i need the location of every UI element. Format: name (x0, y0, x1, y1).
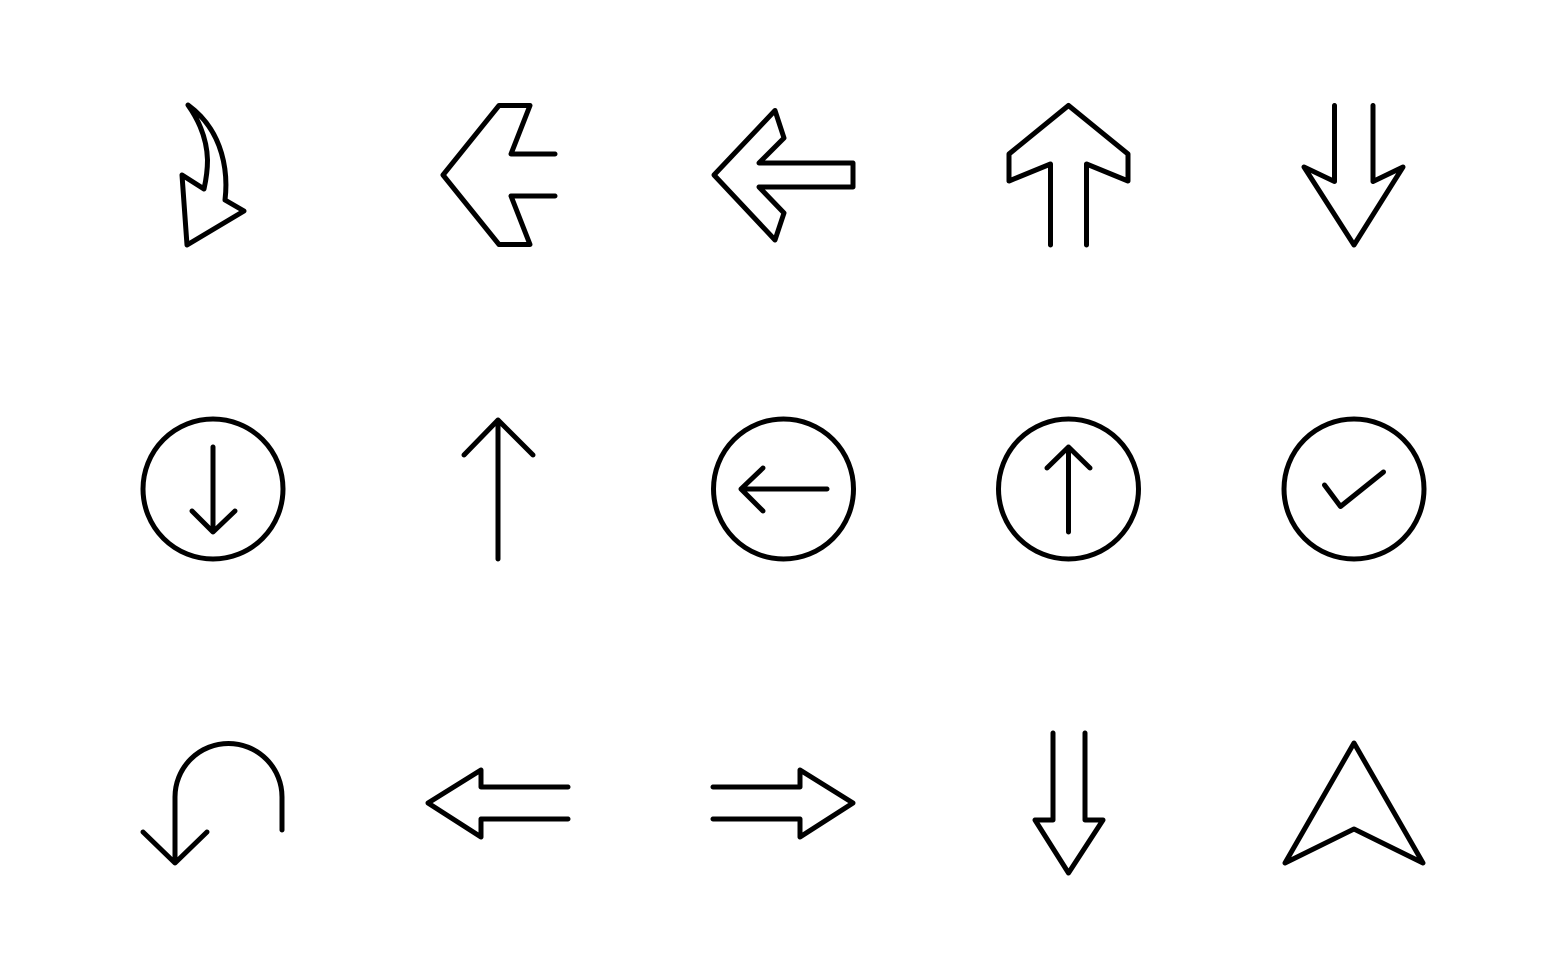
icon: double-line left arrow (428, 770, 568, 837)
icon: circled up arrow (998, 419, 1138, 559)
icon: thin up arrow (464, 420, 533, 559)
icon: navigation pointer (1285, 743, 1423, 863)
icon: narrow down arrow (1035, 733, 1103, 873)
icon: circled left arrow (714, 419, 854, 559)
icon: circled check mark (1284, 419, 1424, 559)
icon: wide left arrow with open tail (443, 106, 555, 244)
icon: u-turn arrow (143, 744, 282, 863)
icon: circled down arrow (143, 419, 283, 559)
icon: curved arrow down (182, 105, 244, 245)
icon: double-line right arrow (713, 770, 853, 837)
icon: left block arrow (714, 110, 853, 240)
icon: down arrow with open tail (1304, 106, 1403, 245)
icon: up block arrow with open tail (1009, 106, 1128, 245)
